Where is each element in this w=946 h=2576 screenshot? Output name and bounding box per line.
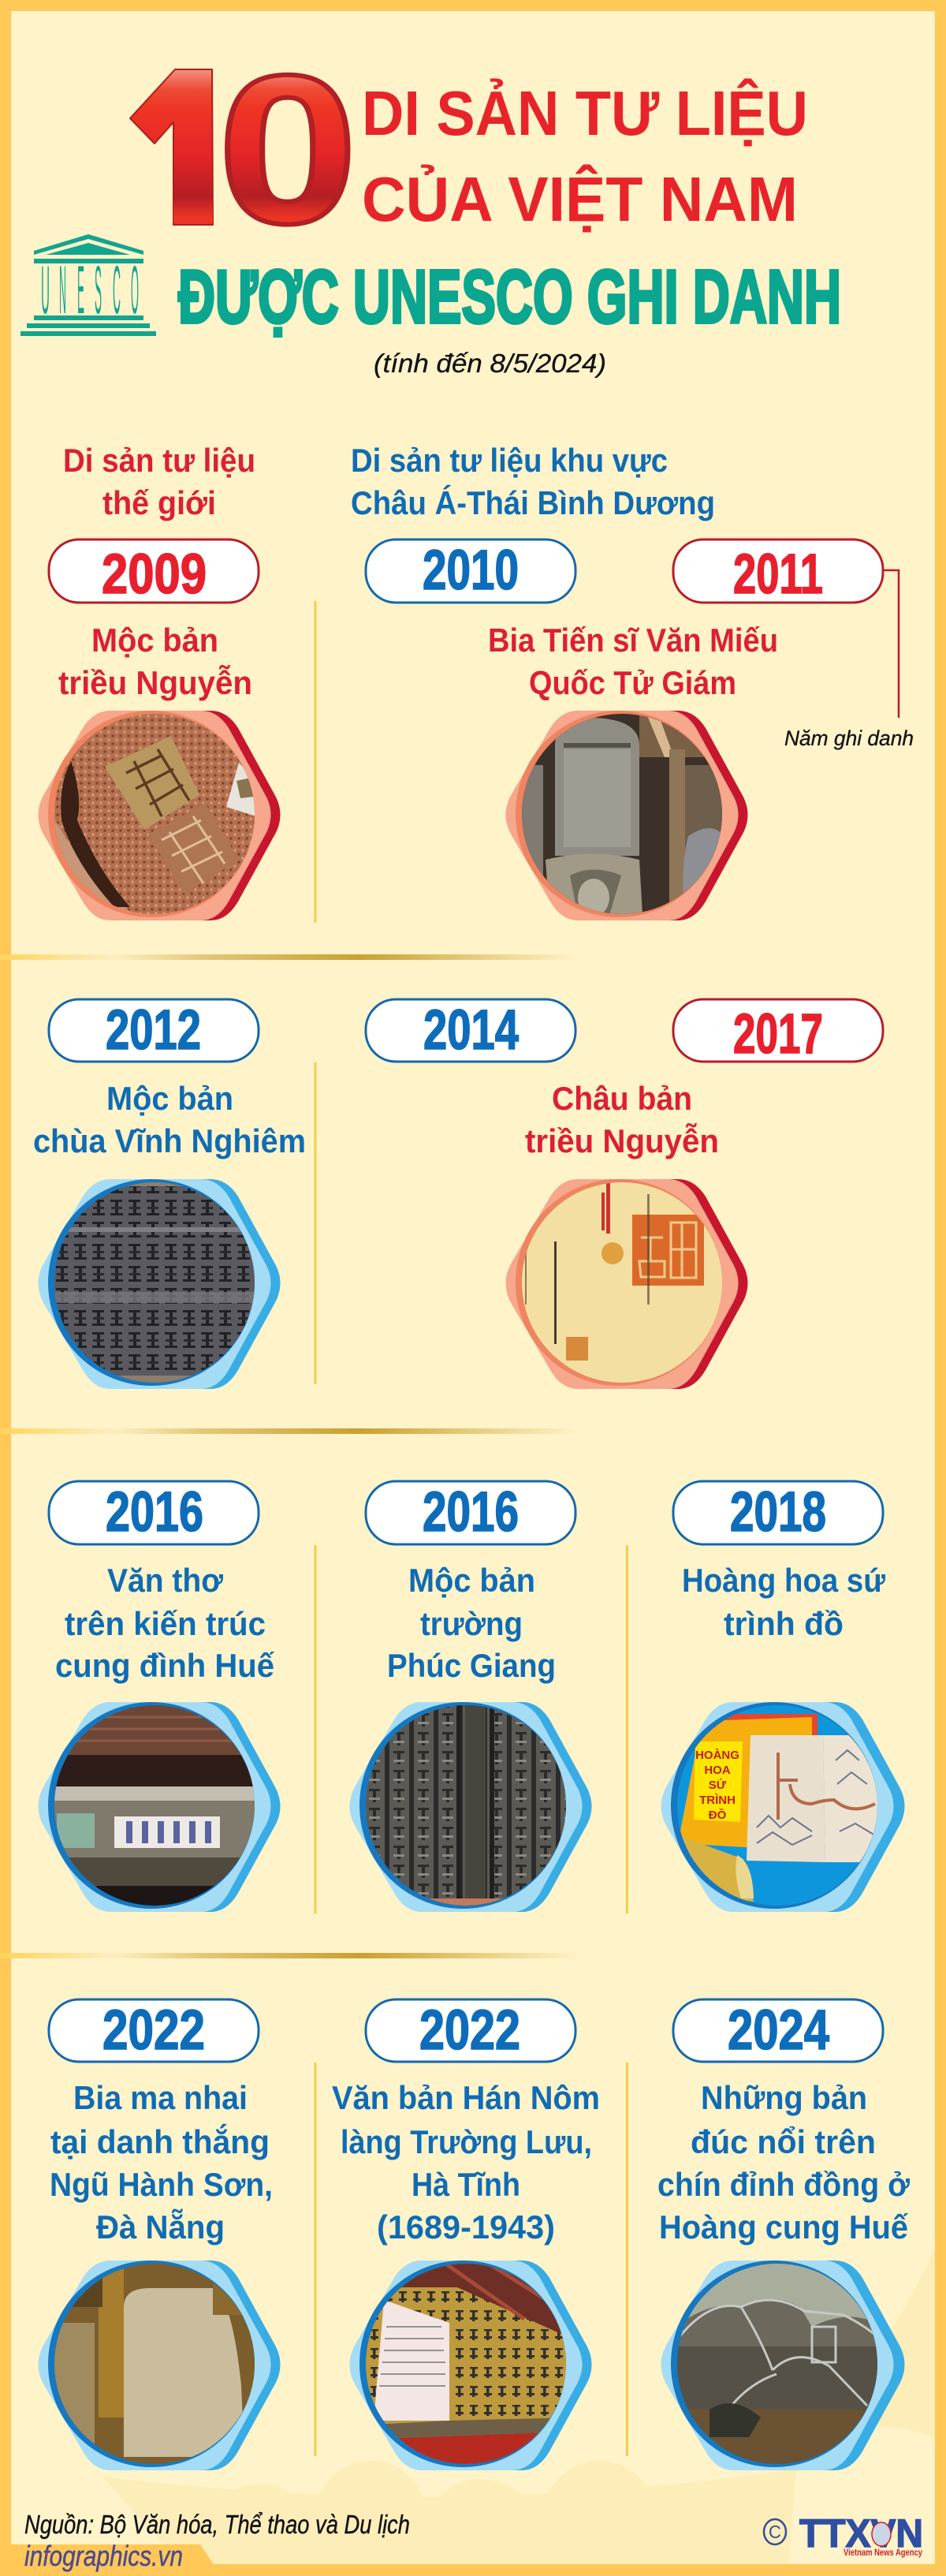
icon: UNESCO temple logo: S	[95, 252, 102, 328]
title number 10: 1	[143, 27, 222, 270]
infographic canvas: O	[131, 252, 139, 328]
row 3 / row 4 separator	[0, 1953, 579, 1958]
book cover title: TRÌNH	[699, 1794, 736, 1807]
photo hexagon: Vinh Nghiem woodblock	[38, 1178, 281, 1391]
label: Moc ban chua Vinh Nghiem: chùa Vĩnh Nghiêm	[33, 1122, 306, 1159]
source note: Nguồn: Bộ Văn hóa, Thể thao và Du lịch	[24, 2510, 410, 2539]
label: Moc ban chua Vinh Nghiem	[33, 1080, 306, 1159]
label: Bia ma nhai: tại danh thắng	[50, 2122, 270, 2160]
title number 10	[129, 69, 350, 227]
photo hexagon: Phuc Giang woodblock	[350, 1701, 591, 1914]
icon: UNESCO temple logo: E	[77, 252, 84, 328]
label: Hoang hoa su trinh do: Hoàng hoa sứ	[682, 1562, 886, 1599]
year pill 2016 col 2: 2016	[423, 1481, 519, 1544]
icon: UNESCO temple logo: U	[41, 252, 50, 328]
callout: registration year	[784, 570, 914, 750]
year pill 2022 col 1: 2022	[102, 1999, 205, 2062]
label: Bia Tien si: Quốc Tử Giám	[529, 664, 736, 701]
year pill 2009	[49, 539, 259, 606]
label: Moc ban trieu Nguyen	[58, 622, 252, 701]
book cover title	[695, 1749, 739, 1822]
label: Van tho	[55, 1562, 275, 1684]
label: Bia Tien si	[488, 622, 778, 701]
label: Moc ban chua Vinh Nghiem: Mộc bản	[106, 1080, 233, 1117]
year pill 2017: 2017	[733, 1003, 823, 1066]
logo: TTXVN copyright: TTXVN	[799, 2511, 923, 2555]
title number 10: 0	[218, 31, 358, 267]
book cover title: SỨ	[709, 1778, 727, 1792]
year pill 2024: 2024	[728, 1999, 829, 2062]
callout: registration year: Năm ghi danh	[784, 726, 914, 750]
year pill 2016 col 1: 2016	[106, 1481, 203, 1544]
title	[129, 69, 839, 338]
year pill 2011: 2011	[733, 543, 823, 606]
label: Chau ban trieu Nguyen: Châu bản	[552, 1080, 692, 1117]
legend: world heritage: Di sản tư liệu	[63, 442, 255, 479]
label: Moc ban trieu Nguyen: Mộc bản	[91, 622, 218, 659]
label: Van ban Han Nom: Văn bản Hán Nôm	[332, 2079, 600, 2116]
year pill 2024	[673, 1999, 883, 2062]
label: Moc ban Phuc Giang: Phúc Giang	[387, 1647, 556, 1684]
photo hexagon: cliff inscription	[38, 2260, 281, 2473]
year pill 2022 col 1	[49, 1999, 259, 2062]
label: Van tho: cung đình Huế	[55, 1647, 275, 1684]
photo hexagon: Han Nom text	[350, 2260, 591, 2473]
photo hexagon: imperial record with seal	[506, 1178, 747, 1391]
website tab: infographics.vn	[24, 2540, 183, 2572]
year pill 2009: 2009	[102, 543, 207, 606]
label: Cuu dinh: đúc nổi trên	[691, 2123, 876, 2160]
legend: world heritage	[63, 442, 255, 521]
row 2 divider	[314, 1062, 317, 1384]
year pill 2014: 2014	[423, 999, 519, 1062]
label: Cuu dinh: Những bản	[701, 2079, 867, 2116]
label: Moc ban Phuc Giang: Mộc bản	[408, 1562, 535, 1599]
photo hexagon: Hue architecture poetry	[38, 1701, 281, 1914]
label: Chau ban trieu Nguyen	[525, 1080, 719, 1159]
icon: UNESCO temple logo	[20, 234, 156, 336]
legend: Asia-Pacific heritage	[351, 442, 715, 521]
year pill 2014	[366, 999, 575, 1062]
label: Bia ma nhai: Bia ma nhai	[73, 2079, 248, 2116]
label: Moc ban Phuc Giang	[387, 1562, 556, 1684]
photo hexagon: wood seal blocks	[38, 710, 281, 923]
label: Chau ban trieu Nguyen: triều Nguyễn	[525, 1122, 719, 1159]
label: Van tho: trên kiến trúc	[65, 1605, 266, 1642]
row 1 divider	[314, 601, 317, 923]
year pill 2022 col 2	[366, 1999, 575, 2062]
label: Bia ma nhai: Ngũ Hành Sơn,	[50, 2166, 273, 2203]
date note: (tính đến 8/5/2024)	[374, 349, 606, 378]
label: Moc ban Phuc Giang: trường	[420, 1605, 523, 1642]
label: Cuu dinh	[657, 2079, 910, 2246]
legend: Asia-Pacific heritage: Châu Á-Thái Bình Dương	[351, 484, 715, 521]
year pill 2018	[673, 1481, 883, 1544]
label: Cuu dinh: Hoàng cung Huế	[659, 2208, 909, 2246]
year pill 2016 col 1	[49, 1481, 259, 1544]
label: Van tho: Văn thơ	[107, 1562, 223, 1599]
year pill 2022 col 2: 2022	[419, 1999, 520, 2062]
year pill 2017	[673, 999, 883, 1066]
year pill 2010	[366, 539, 575, 603]
title line 2: CỦA VIỆT NAM	[362, 164, 798, 234]
icon: UNESCO temple logo: N	[59, 252, 66, 328]
label: Bia ma nhai: Đà Nẵng	[96, 2208, 225, 2246]
year pill 2011	[673, 539, 883, 606]
photo hexagon: Hoang hoa su trinh do book	[661, 1701, 905, 1914]
row 4 dividers	[314, 2063, 628, 2456]
row 2 / row 3 separator	[0, 1428, 579, 1434]
book cover title: HOÀNG	[695, 1749, 739, 1762]
logo: TTXVN copyright: C	[769, 2522, 781, 2542]
year pill 2012: 2012	[106, 999, 201, 1062]
legend: world heritage: thế giới	[102, 484, 216, 521]
title line 1: DI SẢN TƯ LIỆU	[362, 78, 808, 148]
book cover title: ĐỒ	[709, 1808, 727, 1822]
label: Hoang hoa su trinh do	[682, 1562, 886, 1642]
row 1 / row 2 separator	[0, 954, 579, 960]
icon: UNESCO temple logo: C	[113, 252, 121, 328]
label: Moc ban trieu Nguyen: triều Nguyễn	[58, 663, 252, 701]
row 3 dividers	[314, 1545, 628, 1913]
photo hexagon: Van Mieu stele	[506, 710, 747, 923]
decorative cloud pattern at bottom	[102, 2248, 935, 2576]
logo: TTXVN copyright: Vietnam News Agency	[844, 2548, 922, 2558]
label: Hoang hoa su trinh do: trình đồ	[724, 1605, 844, 1642]
label: Van ban Han Nom: Hà Tĩnh	[412, 2166, 520, 2203]
year pill 2016 col 2	[366, 1481, 575, 1544]
label: Bia Tien si: Bia Tiến sĩ Văn Miếu	[488, 622, 778, 659]
label: Van ban Han Nom: làng Trường Lưu,	[341, 2123, 592, 2160]
label: Bia ma nhai	[50, 2079, 273, 2246]
year pill 2018: 2018	[730, 1481, 826, 1544]
year pill 2012	[49, 999, 259, 1062]
legend: Asia-Pacific heritage: Di sản tư liệu khu vực	[351, 442, 668, 479]
year pill 2010: 2010	[423, 539, 519, 602]
book cover title: HOA	[704, 1764, 731, 1777]
label: Cuu dinh: chín đỉnh đồng ở	[657, 2166, 910, 2203]
label: Van ban Han Nom: (1689-1943)	[377, 2208, 555, 2246]
label: Van ban Han Nom	[332, 2079, 600, 2246]
photo hexagon: bronze urn relief	[661, 2260, 905, 2473]
